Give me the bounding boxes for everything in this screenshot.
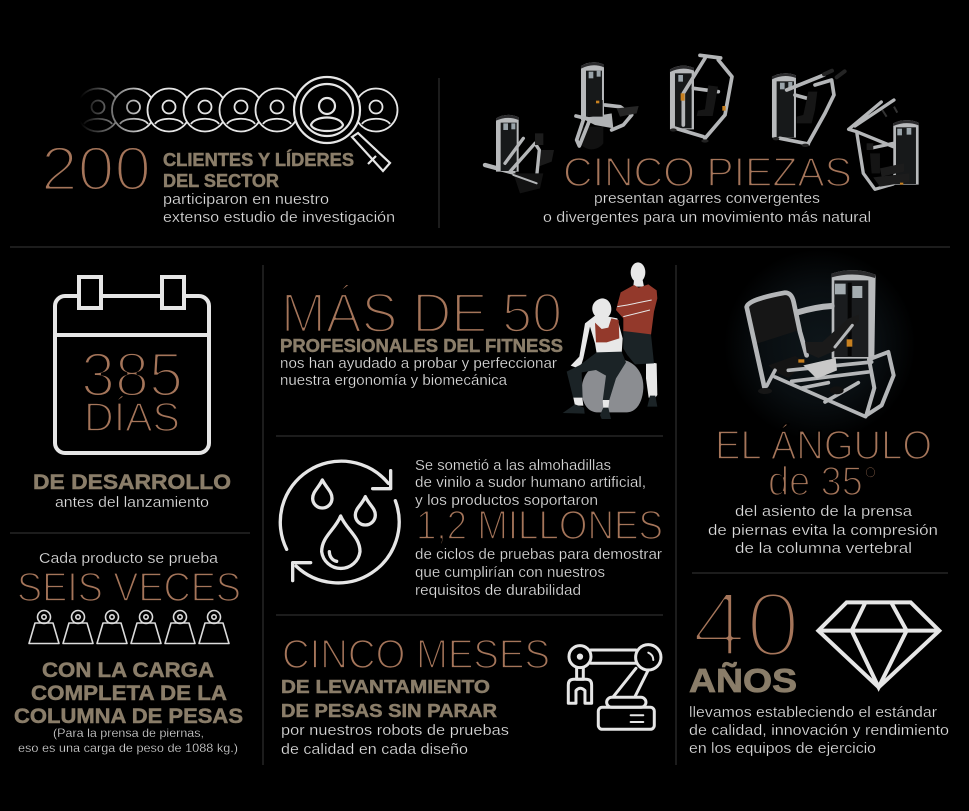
text: participation: participaron en nuestro [163, 192, 329, 208]
icon: two athletes [563, 262, 657, 419]
number: 385 días: 385 [81, 341, 183, 410]
heading: cinco meses: CINCO MESES [282, 631, 550, 677]
text: ergonomics: nuestra ergonomía y biomecánica [280, 373, 508, 389]
text: setting the standard: en los equipos de ejercicio [689, 741, 876, 757]
panel: fitness professionals [280, 262, 657, 419]
text: footnote [18, 726, 238, 755]
number: 40: 40 [692, 574, 800, 676]
text: sweat test: y los productos soportaron [415, 493, 598, 509]
machine 4 [772, 71, 845, 147]
heading: full load: COLUMNA DE PESAS [14, 705, 243, 728]
text: test cycles: que cumplirían con nuestros [415, 565, 605, 581]
text: grips: o divergentes para un movimiento más natural [543, 210, 871, 226]
text: robots [281, 723, 509, 758]
image: leg press glow [724, 249, 916, 441]
text: each product: Cada producto se prueba [39, 551, 219, 567]
panel: 385 days [33, 277, 231, 511]
text: participation [163, 192, 395, 226]
heading: el ángulo de 35: EL ÁNGULO [715, 422, 932, 468]
text: footnote: eso es una carga de peso de 1088 kg.) [18, 741, 238, 755]
heading: clients and leaders: CLIENTES Y LÍDERES [163, 149, 354, 170]
text: robots: por nuestros robots de pruebas [281, 723, 509, 739]
heading: nonstop lifting: DE PESAS SIN PARAR [281, 701, 497, 721]
heading: seis veces: SEIS VECES [17, 564, 241, 610]
heading: el ángulo de 35: de 35° [768, 458, 878, 504]
machine 3 [670, 55, 732, 143]
heading: nonstop lifting [281, 677, 497, 721]
text: setting the standard [689, 705, 949, 757]
panel: 200 clients [41, 77, 398, 226]
heading: clients and leaders: DEL SECTOR [163, 171, 279, 191]
panel: 35 degree angle [708, 249, 938, 557]
heading: full load [14, 659, 243, 728]
text: grips [543, 191, 871, 226]
text: setting the standard: llevamos estableciendo el estándar [689, 705, 937, 721]
text: test cycles: de ciclos de pruebas para demostrar [415, 547, 662, 563]
text: seat angle: de la columna vertebral [735, 541, 912, 557]
heading: clients and leaders [163, 149, 354, 191]
text: robots: de calidad en cada diseño [281, 742, 468, 758]
text: ergonomics [280, 356, 557, 389]
icon: six weights [29, 610, 229, 644]
image: five machines [485, 55, 919, 193]
icon: calendar [55, 277, 209, 453]
text: test cycles [415, 547, 662, 599]
heading: años: AÑOS [689, 662, 797, 699]
text: setting the standard: de calidad, innovación y rendimiento [689, 723, 949, 739]
text: sweat test: Se sometió a las almohadillas [415, 458, 611, 474]
text: ergonomics: nos han ayudado a probar y perfeccionar [280, 356, 557, 372]
heading: fitness professionals: PROFESIONALES DEL FITNESS [280, 336, 563, 356]
text: sweat test: de vinilo a sudor humano artificial, [415, 475, 646, 491]
icon: sweat drops with cycle arrows [280, 461, 399, 583]
panel: five months [281, 631, 661, 758]
heading: el ángulo de 35 [715, 422, 932, 504]
machine 1 [485, 115, 554, 193]
icon: robot arm [568, 645, 661, 729]
number: 200: 200 [41, 135, 151, 204]
text: sweat test [415, 458, 646, 509]
heading: nonstop lifting: DE LEVANTAMIENTO [281, 677, 490, 697]
icon: row of people with magnifying glass [76, 77, 398, 171]
text: before launch: antes del lanzamiento [55, 495, 209, 511]
text: seat angle: de piernas evita la compresión [708, 523, 938, 539]
image: leg press machine [747, 270, 894, 417]
panel: 1.2 million [280, 458, 663, 599]
heading: full load: COMPLETA DE LA [31, 682, 227, 705]
number: 385 días [81, 341, 183, 440]
heading: full load: CON LA CARGA [42, 659, 214, 682]
heading: más de 50: MÁS DE 50 [281, 281, 562, 344]
panel: six times [14, 551, 243, 755]
text: test cycles: requisitos de durabilidad [415, 583, 581, 599]
number: 385 días: DÍAS [84, 394, 180, 440]
machine 5 [849, 100, 919, 189]
heading: de desarrollo: DE DESARROLLO [33, 471, 231, 494]
panel: five pieces [485, 55, 919, 226]
panel: 40 years [689, 574, 949, 757]
icon: diamond [818, 602, 939, 687]
heading: 1,2 millones: 1,2 MILLONES [416, 502, 663, 548]
text: footnote: (Para la prensa de piernas, [53, 726, 204, 740]
heading: cinco piezas: CINCO PIEZAS [563, 149, 852, 195]
text: seat angle: del asiento de la prensa [735, 504, 913, 520]
text: seat angle [708, 504, 938, 557]
machine 2 [576, 62, 639, 149]
text: participation: extenso estudio de investigación [163, 210, 395, 226]
text: grips: presentan agarres convergentes [594, 191, 820, 207]
